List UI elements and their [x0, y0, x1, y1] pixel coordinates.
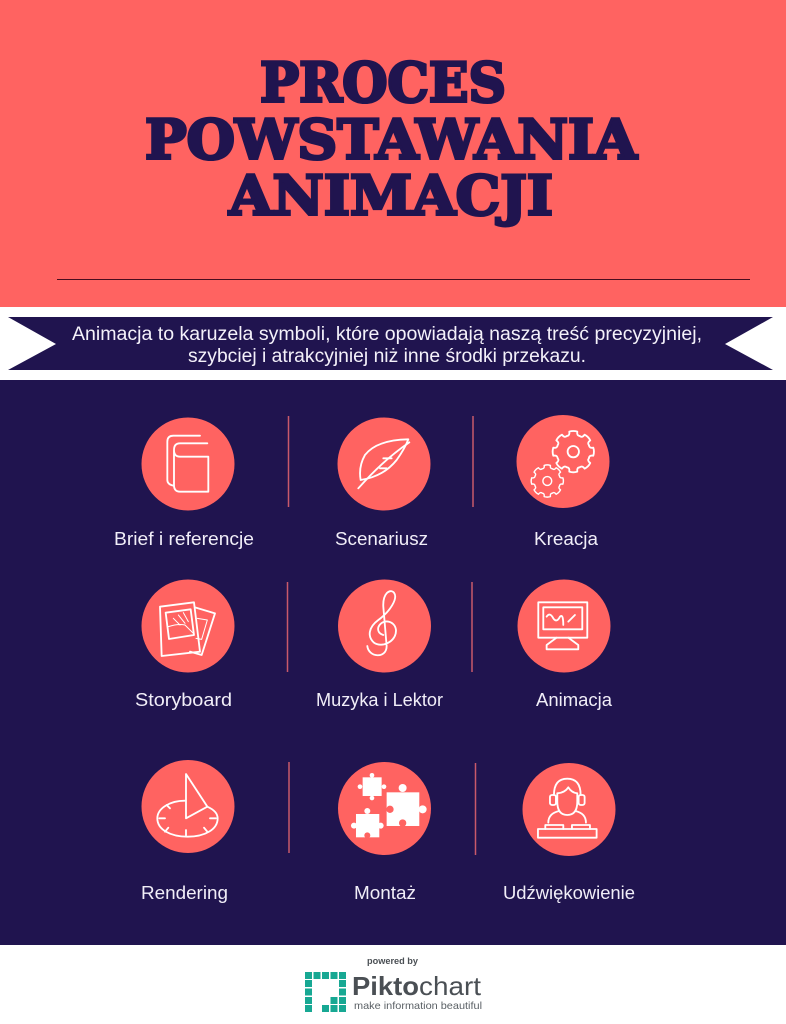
icon: treble clef: [338, 580, 431, 672]
icon: puzzle: [338, 762, 431, 855]
footer: piktochart wordmark: Piktochart: [352, 971, 482, 1001]
icon: sundial clock: [142, 760, 234, 853]
banner: Animacja to karuzela symboli, które opowiadają naszą treść precyzyjniej,: [72, 324, 702, 345]
label: storyboard: Storyboard: [135, 690, 232, 710]
icon: piktochart logo: [305, 972, 346, 1012]
icon: feather: [338, 418, 430, 510]
icon: storyboard photos: [142, 580, 234, 672]
label: muzyka i lektor: Muzyka i Lektor: [316, 690, 443, 710]
panel: steps background: [0, 380, 786, 945]
title: POWSTAWANIA: [145, 108, 638, 172]
banner: szybciej i atrakcyjniej niż inne środki przekazu.: [188, 346, 586, 367]
label: udzwiekowienie: Udźwiękowienie: [503, 883, 635, 903]
footer: powered by: powered by: [367, 956, 418, 966]
title: ANIMACJI: [228, 164, 553, 228]
label: animacja: Animacja: [536, 690, 613, 710]
header rule: [57, 279, 750, 280]
footer: tagline: make information beautiful: [354, 1000, 482, 1012]
icon: sound engineer: [522, 763, 616, 856]
title: PROCES: [260, 50, 506, 114]
icon: monitor: [518, 580, 610, 672]
label: kreacja: Kreacja: [534, 529, 599, 549]
icon: gears: [516, 415, 610, 508]
label: rendering: Rendering: [141, 883, 228, 903]
icon: books: [142, 418, 234, 510]
label: montaz: Montaż: [354, 883, 416, 903]
label: scenariusz: Scenariusz: [335, 529, 428, 549]
label: brief: Brief i referencje: [114, 529, 254, 549]
banner: [8, 317, 773, 370]
panel: header background: [0, 0, 786, 307]
title: [145, 50, 638, 228]
